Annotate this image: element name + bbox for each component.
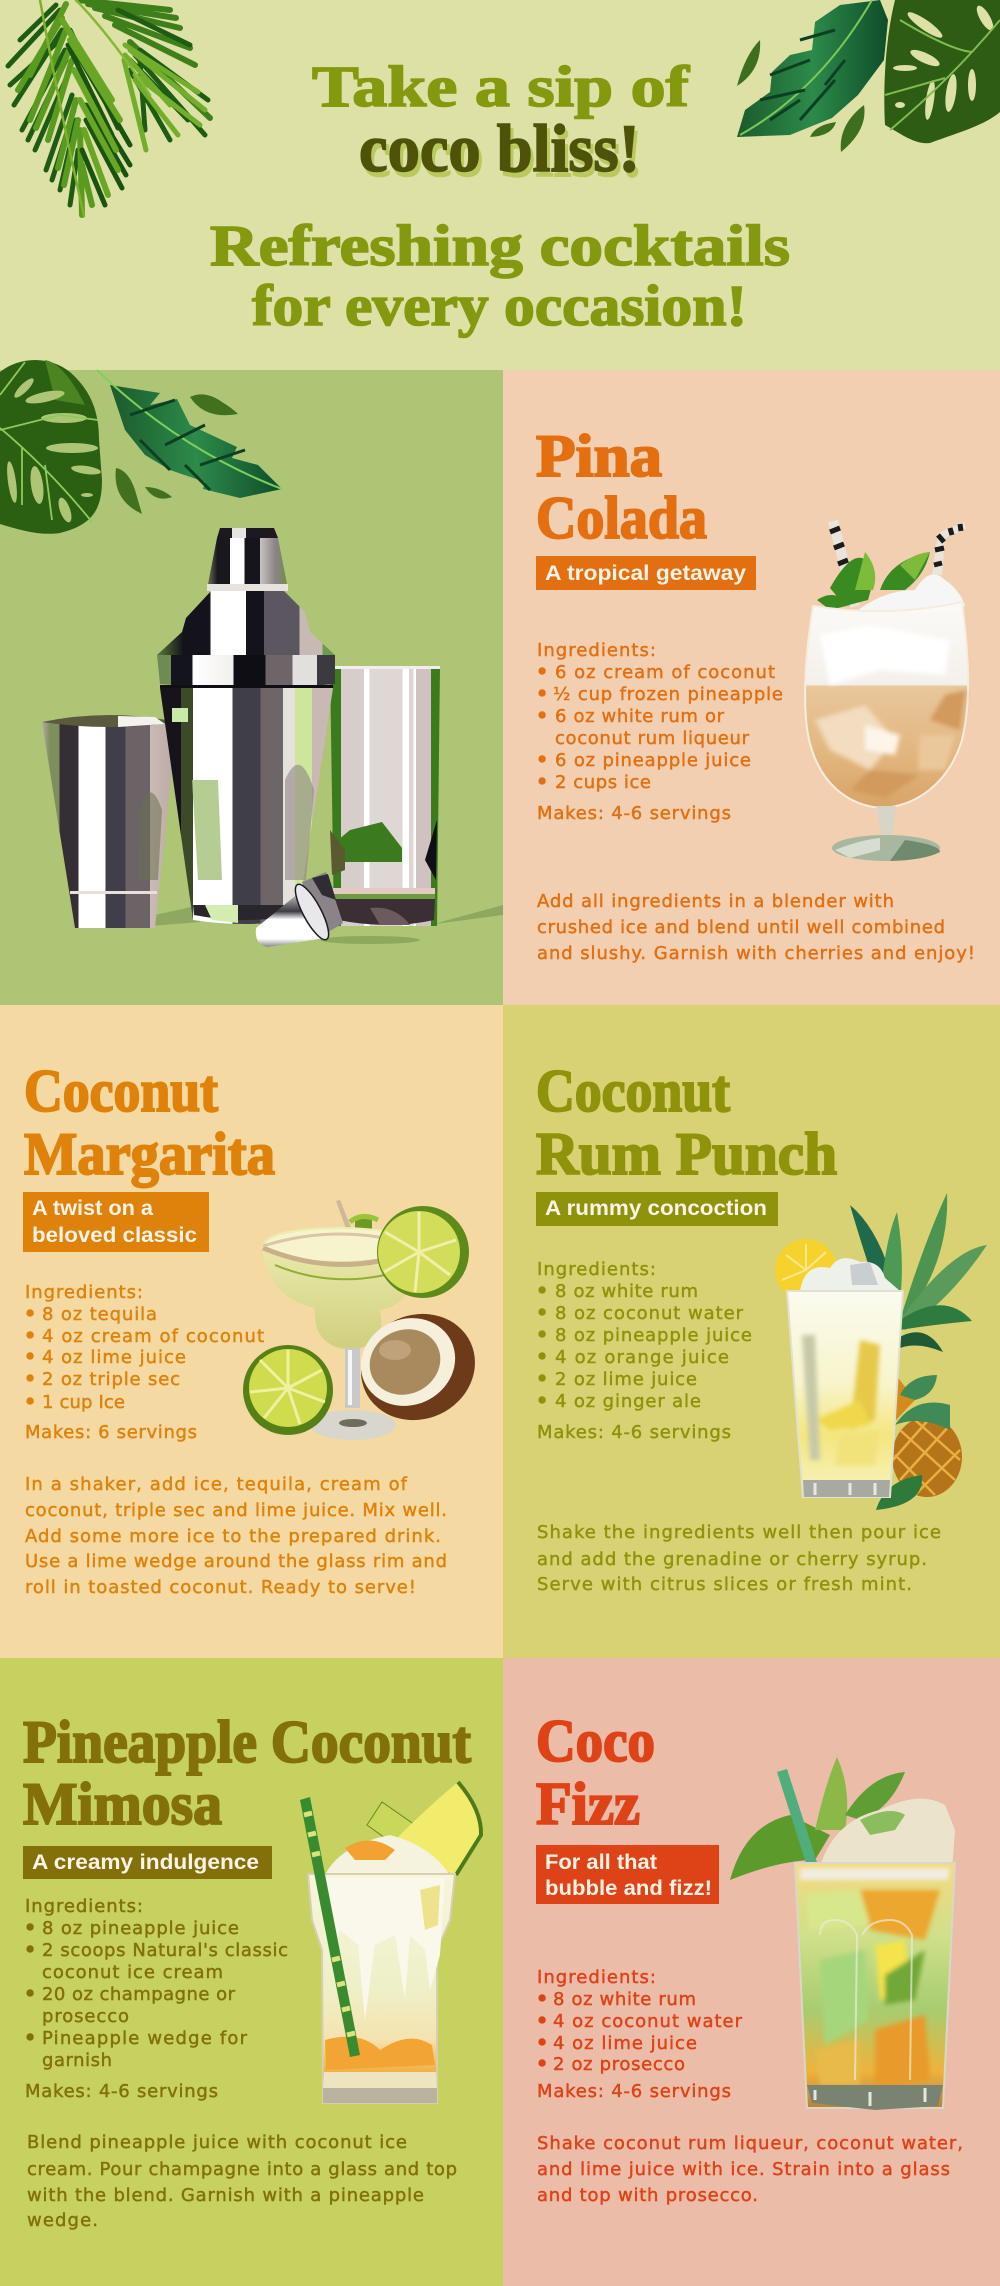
illustration: shaker xyxy=(157,528,335,924)
ingredients: • xyxy=(535,2007,549,2035)
ingredients: • xyxy=(535,2029,549,2057)
ingredients: 4 oz ginger ale xyxy=(555,1391,701,1412)
ingredients xyxy=(535,1259,752,1443)
illustration: rum punch glass with pineapple xyxy=(775,1193,987,1510)
title: Rum Punch xyxy=(536,1121,837,1187)
tag: A creamy indulgence xyxy=(32,1851,259,1874)
method: Blend pineapple juice with coconut ice xyxy=(27,2132,407,2153)
method xyxy=(27,2132,457,2231)
heading: subtitle: for every occasion! xyxy=(252,273,747,338)
ingredients: 8 oz tequila xyxy=(42,1304,157,1325)
ingredients: 2 oz triple sec xyxy=(42,1369,180,1390)
method xyxy=(537,2133,963,2206)
icon: small leaves top right xyxy=(737,40,865,152)
ingredients: • xyxy=(535,746,549,774)
ingredients: • xyxy=(535,1387,549,1415)
ingredients: Ingredients: xyxy=(25,1896,143,1917)
title: Coconut xyxy=(24,1058,218,1124)
ingredients: • xyxy=(535,1321,549,1349)
method xyxy=(25,1474,447,1598)
illustration: mixing glass xyxy=(330,666,440,926)
ingredients xyxy=(23,1282,264,1443)
method: cream. Pour champagne into a glass and top xyxy=(27,2159,457,2180)
illustration: ground shadows xyxy=(150,905,503,944)
tag: For all that xyxy=(545,1851,657,1874)
tag xyxy=(23,1846,272,1879)
ingredients: ½ cup frozen pineapple xyxy=(553,684,783,705)
ingredients: Ingredients: xyxy=(537,1967,656,1988)
method xyxy=(537,891,975,964)
ingredients: 6 oz cream of coconut xyxy=(555,662,775,683)
ingredients: • xyxy=(535,658,549,686)
tag: A twist on a xyxy=(32,1197,153,1220)
method: and lime juice with ice. Strain into a glass xyxy=(537,2159,950,2180)
title xyxy=(536,1058,837,1187)
ingredients: prosecco xyxy=(42,2006,129,2027)
panel: header xyxy=(0,0,1000,370)
title: Mimosa xyxy=(23,1771,222,1837)
method: roll in toasted coconut. Ready to serve! xyxy=(25,1577,416,1598)
icon: banana leaf top right xyxy=(737,0,888,137)
tag xyxy=(536,1192,778,1226)
heading: subtitle xyxy=(210,213,790,338)
ingredients: 4 oz lime juice xyxy=(42,1347,186,1368)
illustration: small leaves xyxy=(116,394,238,514)
heading: coco bliss: coco bliss! xyxy=(362,115,643,191)
panel: coco fizz xyxy=(503,1658,1000,2286)
title xyxy=(23,1709,471,1837)
ingredients: Ingredients: xyxy=(25,1282,143,1303)
title xyxy=(536,1708,655,1837)
ingredients: • xyxy=(535,2050,549,2078)
ingredients: • xyxy=(23,2024,37,2052)
heading: take a sip of: Take a sip of xyxy=(312,54,690,119)
ingredients: • xyxy=(23,1980,37,2008)
method: In a shaker, add ice, tequila, cream of xyxy=(25,1474,408,1495)
ingredients: • xyxy=(535,1985,549,2013)
ingredients: Pineapple wedge for xyxy=(42,2028,248,2049)
ingredients: 1 cup Ice xyxy=(42,1392,125,1413)
title: Fizz xyxy=(536,1771,640,1837)
method: and slushy. Garnish with cherries and enjoy! xyxy=(537,943,975,964)
ingredients xyxy=(23,1896,288,2102)
method: and add the grenadine or cherry syrup. xyxy=(537,1549,927,1570)
tag xyxy=(536,556,756,590)
icon: monstera top right xyxy=(884,0,1000,143)
ingredients: Ingredients: xyxy=(537,640,656,661)
ingredients: 2 scoops Natural's classic xyxy=(42,1940,288,1961)
method: Add some more ice to the prepared drink. xyxy=(25,1526,441,1547)
ingredients: • xyxy=(535,1343,549,1371)
ingredients: • xyxy=(535,1365,549,1393)
ingredients: 6 oz pineapple juice xyxy=(555,750,751,771)
illustration: monstera leaf xyxy=(0,360,102,534)
ingredients: 6 oz white rum or xyxy=(555,706,725,727)
tag xyxy=(536,1845,719,1904)
ingredients: coconut rum liqueur xyxy=(555,728,750,749)
method: Shake coconut rum liqueur, coconut water, xyxy=(537,2133,963,2154)
illustration: metal cup xyxy=(42,715,177,928)
method xyxy=(537,1522,941,1595)
title: Pina xyxy=(536,423,662,489)
title: Margarita xyxy=(24,1121,275,1187)
illustration: banana leaf xyxy=(97,370,282,498)
ingredients: garnish xyxy=(42,2050,112,2071)
ingredients: coconut ice cream xyxy=(42,1962,223,1983)
ingredients: • xyxy=(535,1277,549,1305)
tag xyxy=(23,1192,209,1252)
ingredients: • xyxy=(535,1299,549,1327)
ingredients: • xyxy=(535,702,549,730)
ingredients: Makes: 4-6 servings xyxy=(537,1422,731,1443)
title: Colada xyxy=(536,485,707,551)
ingredients: 8 oz pineapple juice xyxy=(555,1325,752,1346)
method: Shake the ingredients well then pour ice xyxy=(537,1522,941,1543)
ingredients: 2 cups ice xyxy=(555,772,651,793)
illustration: margarita with lime and coconut xyxy=(243,1200,493,1440)
tag: A rummy concoction xyxy=(545,1197,767,1220)
tag: A tropical getaway xyxy=(545,562,746,585)
method: and top with prosecco. xyxy=(537,2185,758,2206)
illustration: pina colada glass xyxy=(805,520,968,861)
title xyxy=(24,1058,275,1187)
method: wedge. xyxy=(27,2210,98,2231)
title: Coconut xyxy=(536,1058,730,1124)
panel: pineapple coconut mimosa xyxy=(0,1658,503,2286)
ingredients xyxy=(535,640,783,824)
title: Pineapple Coconut xyxy=(23,1709,471,1775)
ingredients: • xyxy=(23,1322,37,1350)
ingredients: • xyxy=(23,1343,37,1371)
panel: coconut rum punch xyxy=(503,1005,1000,1658)
ingredients: 8 oz pineapple juice xyxy=(42,1918,239,1939)
ingredients: • xyxy=(23,1365,37,1393)
ingredients xyxy=(535,1967,743,2102)
ingredients: • xyxy=(535,680,549,708)
ingredients: 4 oz lime juice xyxy=(553,2033,697,2054)
title: Coco xyxy=(536,1708,655,1774)
ingredients: Ingredients: xyxy=(537,1259,656,1280)
panel: shaker set xyxy=(0,360,503,1005)
method: with the blend. Garnish with a pineapple xyxy=(27,2185,424,2206)
ingredients: Makes: 6 servings xyxy=(25,1422,197,1443)
ingredients: 8 oz white rum xyxy=(555,1281,698,1302)
icon: palm frond xyxy=(8,0,210,216)
method: crushed ice and blend until well combined xyxy=(537,917,945,938)
illustration: coco fizz glass xyxy=(730,1757,955,2110)
tag: beloved classic xyxy=(32,1224,197,1247)
heading: subtitle: Refreshing cocktails xyxy=(210,213,790,278)
ingredients: 8 oz white rum xyxy=(553,1989,696,2010)
ingredients: Makes: 4-6 servings xyxy=(537,803,731,824)
ingredients: • xyxy=(23,1936,37,1964)
panel: pina colada xyxy=(503,370,1000,1005)
ingredients: • xyxy=(23,1914,37,1942)
illustration: strainer cap xyxy=(256,872,343,947)
ingredients: Makes: 4-6 servings xyxy=(25,2081,218,2102)
ingredients: 4 oz orange juice xyxy=(555,1347,729,1368)
ingredients: Makes: 4-6 servings xyxy=(537,2081,731,2102)
ingredients: 4 oz coconut water xyxy=(553,2011,743,2032)
method: Use a lime wedge around the glass rim and xyxy=(25,1551,447,1572)
illustration: mimosa glass with pineapple xyxy=(300,1782,481,2103)
ingredients: • xyxy=(23,1300,37,1328)
method: coconut, triple sec and lime juice. Mix well. xyxy=(25,1500,447,1521)
ingredients: 20 oz champagne or xyxy=(42,1984,236,2005)
panel: coconut margarita xyxy=(0,1005,503,1658)
ingredients: 2 oz lime juice xyxy=(555,1369,697,1390)
method: Add all ingredients in a blender with xyxy=(537,891,894,912)
heading: coco bliss: coco bliss! xyxy=(359,110,640,186)
ingredients: • xyxy=(23,1388,37,1416)
tag: bubble and fizz! xyxy=(545,1877,712,1900)
ingredients: 8 oz coconut water xyxy=(555,1303,744,1324)
ingredients: 4 oz cream of coconut xyxy=(42,1326,264,1347)
method: Serve with citrus slices or fresh mint. xyxy=(537,1574,912,1595)
ingredients: • xyxy=(535,768,549,796)
ingredients: 2 oz prosecco xyxy=(553,2054,685,2075)
title xyxy=(536,423,707,551)
